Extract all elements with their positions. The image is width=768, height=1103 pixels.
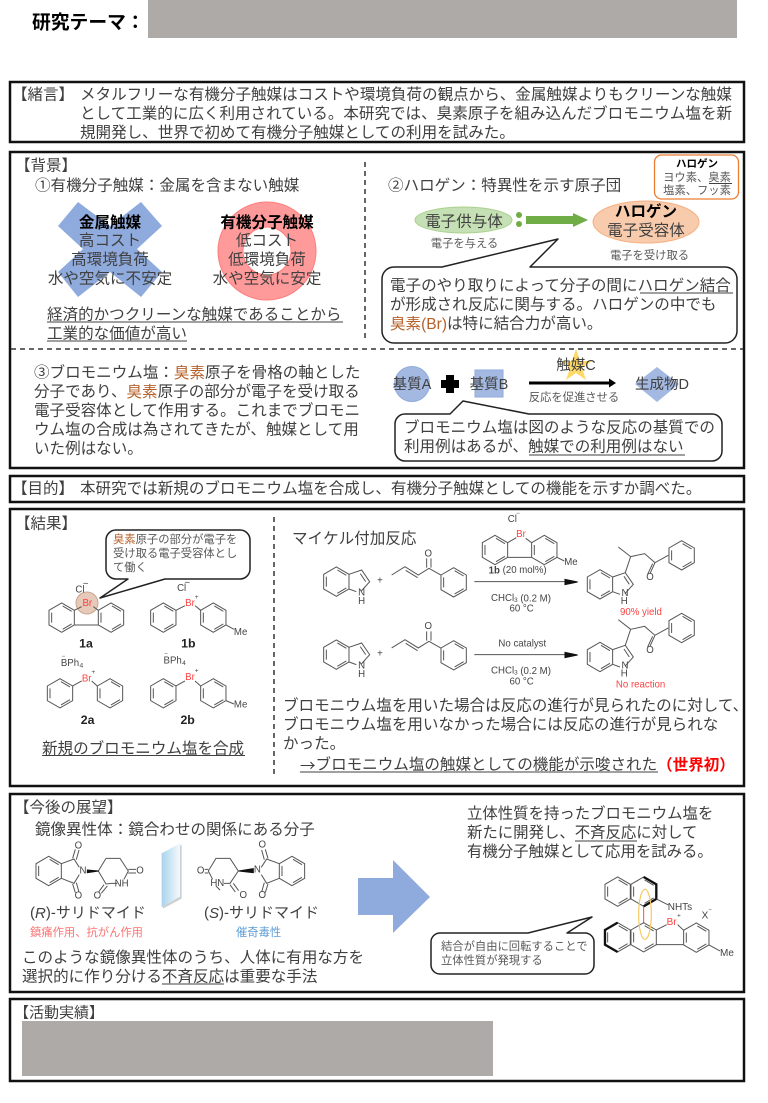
reaction with catalyst: −	[516, 511, 520, 517]
molecule 2b: 2b	[180, 713, 195, 727]
molecule 1b: −	[184, 577, 190, 588]
organic catalyst list	[213, 212, 321, 288]
molecule 2a: −	[62, 654, 66, 660]
substrate A	[393, 366, 432, 402]
reaction with catalyst: O	[425, 548, 433, 559]
bromonium salt text: 分子であり、臭素原子の部分が電子を受け取る	[34, 382, 360, 400]
redacted research theme	[148, 0, 737, 38]
chiral bromonium molecule: X	[702, 910, 709, 921]
product D: 生成物D	[635, 376, 689, 393]
plus sign	[441, 375, 459, 393]
label: promotes reaction: 反応を促進させる	[529, 390, 619, 404]
molecule 2a: BPh	[61, 658, 79, 669]
metal catalyst list: 水や空気に不安定	[48, 270, 172, 288]
purpose heading: 【目的】	[12, 480, 74, 498]
callout: substrate use: 利用例はあるが、触媒での利用例はない	[404, 438, 684, 456]
(R)-thalidomide: N	[79, 865, 86, 876]
introduction text: 規開発し、世界で初めて有機分子触媒としての利用を試みた。	[80, 124, 515, 142]
effect: teratogenic: 催奇毒性	[236, 925, 281, 939]
callout: halogen bond: 電子のやり取りによって分子の間にハロゲン結合	[390, 276, 731, 294]
bromonium salt text: 電子受容体として作用する。これまでブロモニ	[34, 400, 360, 420]
electron donor	[415, 207, 512, 233]
molecule 1b: +	[195, 594, 199, 601]
metal catalyst list: 金属触媒	[79, 212, 142, 232]
callout: bromine atom	[100, 530, 250, 598]
reaction with catalyst: N	[621, 588, 628, 599]
molecule 1b: Me	[234, 627, 247, 638]
molecule 2a: 2a	[81, 713, 95, 727]
metal catalyst list: 高コスト	[79, 232, 141, 250]
callout: halogen bond	[382, 239, 737, 343]
chiral bromonium molecule	[605, 877, 734, 959]
callout: axial chirality: 結合が自由に回転することで	[441, 939, 588, 953]
(R)-thalidomide: O	[94, 890, 102, 901]
reaction with catalyst: 90% yield	[620, 607, 662, 618]
(S)-thalidomide: O	[240, 890, 248, 901]
introduction text	[80, 86, 732, 142]
callout: bromine atom: て働く	[113, 561, 147, 574]
molecule 1a	[49, 578, 124, 650]
panel: results	[10, 509, 748, 786]
callout: bromine atom: 受け取る電子受容体とし	[113, 546, 237, 560]
chiral bromonium molecule: NHTs	[668, 902, 692, 913]
electron donor: 電子供与体	[425, 212, 503, 230]
conclusion text: 工業的な価値が高い	[47, 324, 187, 342]
outlook text: 有機分子触媒として応用を試みる。	[467, 842, 713, 860]
molecule 1a: −	[83, 578, 89, 589]
panel: introduction	[10, 82, 744, 142]
outlook text: 新たに開発し、不斉反応に対して	[467, 824, 697, 842]
reaction without catalyst: (0.2 M)	[518, 665, 551, 676]
label: accepts electrons: 電子を受け取る	[610, 249, 689, 262]
reaction scheme	[324, 511, 694, 690]
callout: halogen bond: 臭素(Br)は特に結合力が高い。	[390, 314, 602, 332]
(R)-thalidomide	[36, 840, 144, 901]
achievements heading: 【活動実績】	[14, 1004, 104, 1022]
chiral bromonium molecule: Br	[667, 917, 677, 928]
molecule 1b: Br	[185, 598, 196, 609]
substrate A: 基質A	[393, 375, 432, 393]
reaction with catalyst: H	[358, 596, 365, 607]
reaction with catalyst: H	[621, 596, 628, 607]
reaction with catalyst: 3	[514, 596, 518, 603]
synthesis caption: 新規のブロモニウム塩を合成	[42, 738, 244, 758]
label: S-thalidomide: (S)-サリドマイド	[204, 904, 319, 922]
reaction without catalyst: O	[425, 621, 433, 632]
reaction with catalyst: Br	[516, 529, 527, 540]
electron transfer arrow	[516, 212, 588, 227]
title: 研究テーマ：	[32, 12, 145, 32]
introduction text: として工業的に広く利用されている。本研究では、臭素原子を組み込んだブロモニウム塩を新	[80, 104, 732, 122]
molecule 2b	[151, 652, 247, 727]
results text: ブロモニウム塩を用いた場合は反応の進行が見られたのに対して、	[283, 696, 748, 714]
(R)-thalidomide: O	[75, 840, 83, 851]
callout: axial chirality	[431, 917, 594, 974]
halogen legend box: ハロゲン	[676, 157, 718, 170]
subheading: halogen: ②ハロゲン：特異性を示す原子団	[388, 176, 621, 194]
reaction with catalyst: Me	[564, 557, 578, 568]
halogen legend box	[654, 155, 738, 199]
label: gives electrons: 電子を与える	[431, 237, 498, 250]
molecule 2b: +	[195, 667, 199, 674]
molecule 1b: Cl	[177, 583, 186, 594]
reaction without catalyst: N	[358, 660, 365, 671]
halogen legend box: ヨウ素、臭素	[663, 171, 731, 184]
(S)-thalidomide: O	[197, 865, 205, 876]
results text	[283, 696, 748, 752]
chiral bromonium molecule: Me	[720, 948, 734, 959]
bromonium salt text	[34, 362, 360, 458]
reaction without catalyst: No catalyst	[498, 638, 547, 649]
label: R-thalidomide: (R)-サリドマイド	[30, 904, 146, 922]
halogen legend box: 塩素、フッ素	[663, 183, 731, 197]
(S)-thalidomide: O	[259, 890, 267, 901]
callout: substrate use	[395, 401, 722, 461]
panel: future outlook	[10, 794, 744, 992]
callout: substrate use: ブロモニウム塩は図のような反応の基質での	[404, 418, 715, 436]
big arrow	[358, 860, 430, 933]
(S)-thalidomide	[197, 839, 305, 901]
(S)-thalidomide: O	[259, 839, 267, 850]
molecule 2b: −	[164, 652, 168, 658]
metal catalyst list: 高環境負荷	[71, 250, 149, 268]
reaction heading: マイケル付加反応	[292, 530, 417, 548]
molecule 2a: Br	[82, 673, 92, 684]
reaction without catalyst: CHCl	[491, 665, 514, 676]
molecule 1b	[151, 577, 247, 650]
enantiomer heading: 鏡像異性体：鏡合わせの関係にある分子	[35, 820, 315, 838]
substrate B	[470, 370, 508, 397]
reaction without catalyst: 60 °C	[510, 676, 534, 687]
reaction with catalyst: N	[358, 587, 365, 598]
molecule 2b: 4	[182, 660, 186, 667]
molecule 2a	[47, 654, 123, 727]
metal catalyst list	[48, 212, 172, 288]
reaction with catalyst: O	[646, 572, 654, 583]
icon: cross	[58, 202, 162, 297]
(S)-thalidomide: N	[254, 864, 261, 875]
molecule 2a: +	[91, 669, 95, 676]
chiral bromonium molecule: +	[677, 912, 681, 919]
background heading: 【背景】	[15, 156, 77, 174]
electron acceptor	[593, 201, 699, 243]
reaction with catalyst: CHCl	[491, 593, 514, 604]
molecule 2b: BPh	[164, 655, 182, 666]
panel: achievements	[10, 999, 744, 1081]
(R)-thalidomide: NH	[115, 878, 129, 889]
callout: halogen bond: が形成され反応に関与する。ハロゲンの中でも	[390, 296, 716, 314]
reaction without catalyst: N	[621, 660, 628, 671]
redacted achievements	[22, 1021, 493, 1076]
chiral bromonium molecule: −	[708, 908, 712, 914]
introduction heading: 【緒言】	[12, 86, 74, 104]
results heading: 【結果】	[15, 514, 77, 532]
organic catalyst list: 低環境負荷	[228, 250, 306, 268]
molecule 2b: Me	[234, 699, 247, 710]
introduction text: メタルフリーな有機分子触媒はコストや環境負荷の観点から、金属触媒よりもクリーンな触媒	[80, 86, 732, 104]
molecule 1b: 1b	[181, 636, 196, 650]
reaction without catalyst: +	[377, 648, 383, 659]
conclusion text: 経済的かつクリーンな触媒であることから	[47, 306, 341, 324]
icon: circle	[218, 202, 316, 300]
conclusion: first in the world: →ブロモニウム塩の触媒としての機能が示唆された（世界初）	[300, 754, 735, 776]
reaction with catalyst: (0.2 M)	[518, 593, 551, 604]
panel: purpose	[10, 476, 744, 502]
substrate B: 基質B	[470, 375, 508, 393]
outlook heading: 【今後の展望】	[14, 798, 123, 816]
molecules 1a 1b 2a 2b	[47, 577, 247, 727]
effect: analgesic and anticancer: 鎮痛作用、抗がん作用	[30, 925, 143, 939]
asymmetric reaction text: このような鏡像異性体のうち、人体に有用な方を	[22, 948, 364, 966]
electron acceptor: ハロゲン	[615, 202, 677, 220]
asymmetric reaction text	[22, 948, 364, 986]
subheading: organic catalyst: ①有機分子触媒：金属を含まない触媒	[35, 176, 300, 194]
outlook text: 立体性質を持ったブロモニウム塩を	[467, 804, 713, 822]
thalidomide molecules	[36, 839, 305, 909]
catalyst C star	[556, 349, 596, 380]
reaction without catalyst: H	[358, 669, 365, 680]
conclusion text	[47, 306, 343, 342]
molecule 1a: Br	[82, 598, 93, 609]
(S)-thalidomide: HN	[210, 878, 224, 889]
reaction without catalyst: H	[621, 668, 628, 679]
molecule 2a: 4	[79, 662, 83, 669]
(R)-thalidomide: O	[75, 890, 83, 901]
organic catalyst list: 水や空気に安定	[213, 270, 321, 288]
organic catalyst list: 有機分子触媒	[220, 212, 314, 232]
product D	[635, 367, 689, 402]
bromonium salt text: ウム塩の合成は為されてきたが、触媒として用	[34, 420, 359, 438]
reaction with catalyst: 60 °C	[510, 603, 534, 614]
molecule 1a: Cl	[75, 584, 85, 595]
molecule 2b: Br	[185, 672, 196, 683]
results text: かった。	[283, 734, 345, 752]
reaction arrow	[529, 378, 616, 388]
bromine highlight	[76, 592, 98, 614]
reaction with catalyst: Cl	[508, 514, 517, 525]
results text: ブロモニウム塩を用いなかった場合には反応の進行が見られな	[283, 714, 718, 734]
panel: background	[10, 152, 744, 468]
purpose text: 本研究では新規のブロモニウム塩を合成し、有機分子触媒としての機能を示すか調べた。	[80, 478, 701, 498]
reaction with catalyst: 1b (20 mol%)	[489, 565, 547, 576]
callout: bromine atom: 臭素原子の部分が電子を	[113, 532, 237, 546]
reaction without catalyst: 3	[514, 669, 518, 676]
reaction without catalyst	[324, 613, 694, 690]
reaction without catalyst: No reaction	[616, 679, 665, 690]
reaction with catalyst: +	[377, 575, 383, 586]
organic catalyst list: 低コスト	[236, 232, 298, 250]
reaction without catalyst: O	[646, 645, 654, 656]
bromonium salt text: いた例はない。	[34, 440, 143, 458]
mirror	[162, 843, 182, 909]
asymmetric reaction text: 選択的に作り分ける不斉反応は重要な手法	[22, 968, 318, 986]
(R)-thalidomide: O	[136, 865, 144, 876]
callout: axial chirality: 立体性質が発現する	[441, 953, 543, 967]
bromonium salt text: ③ブロモニウム塩：臭素原子を骨格の軸とした	[34, 362, 360, 382]
electron acceptor: 電子受容体	[607, 222, 685, 240]
catalyst C star: 触媒C	[556, 357, 596, 374]
outlook text	[467, 804, 713, 860]
molecule 1a: 1a	[79, 636, 93, 650]
reaction with catalyst	[324, 511, 694, 618]
